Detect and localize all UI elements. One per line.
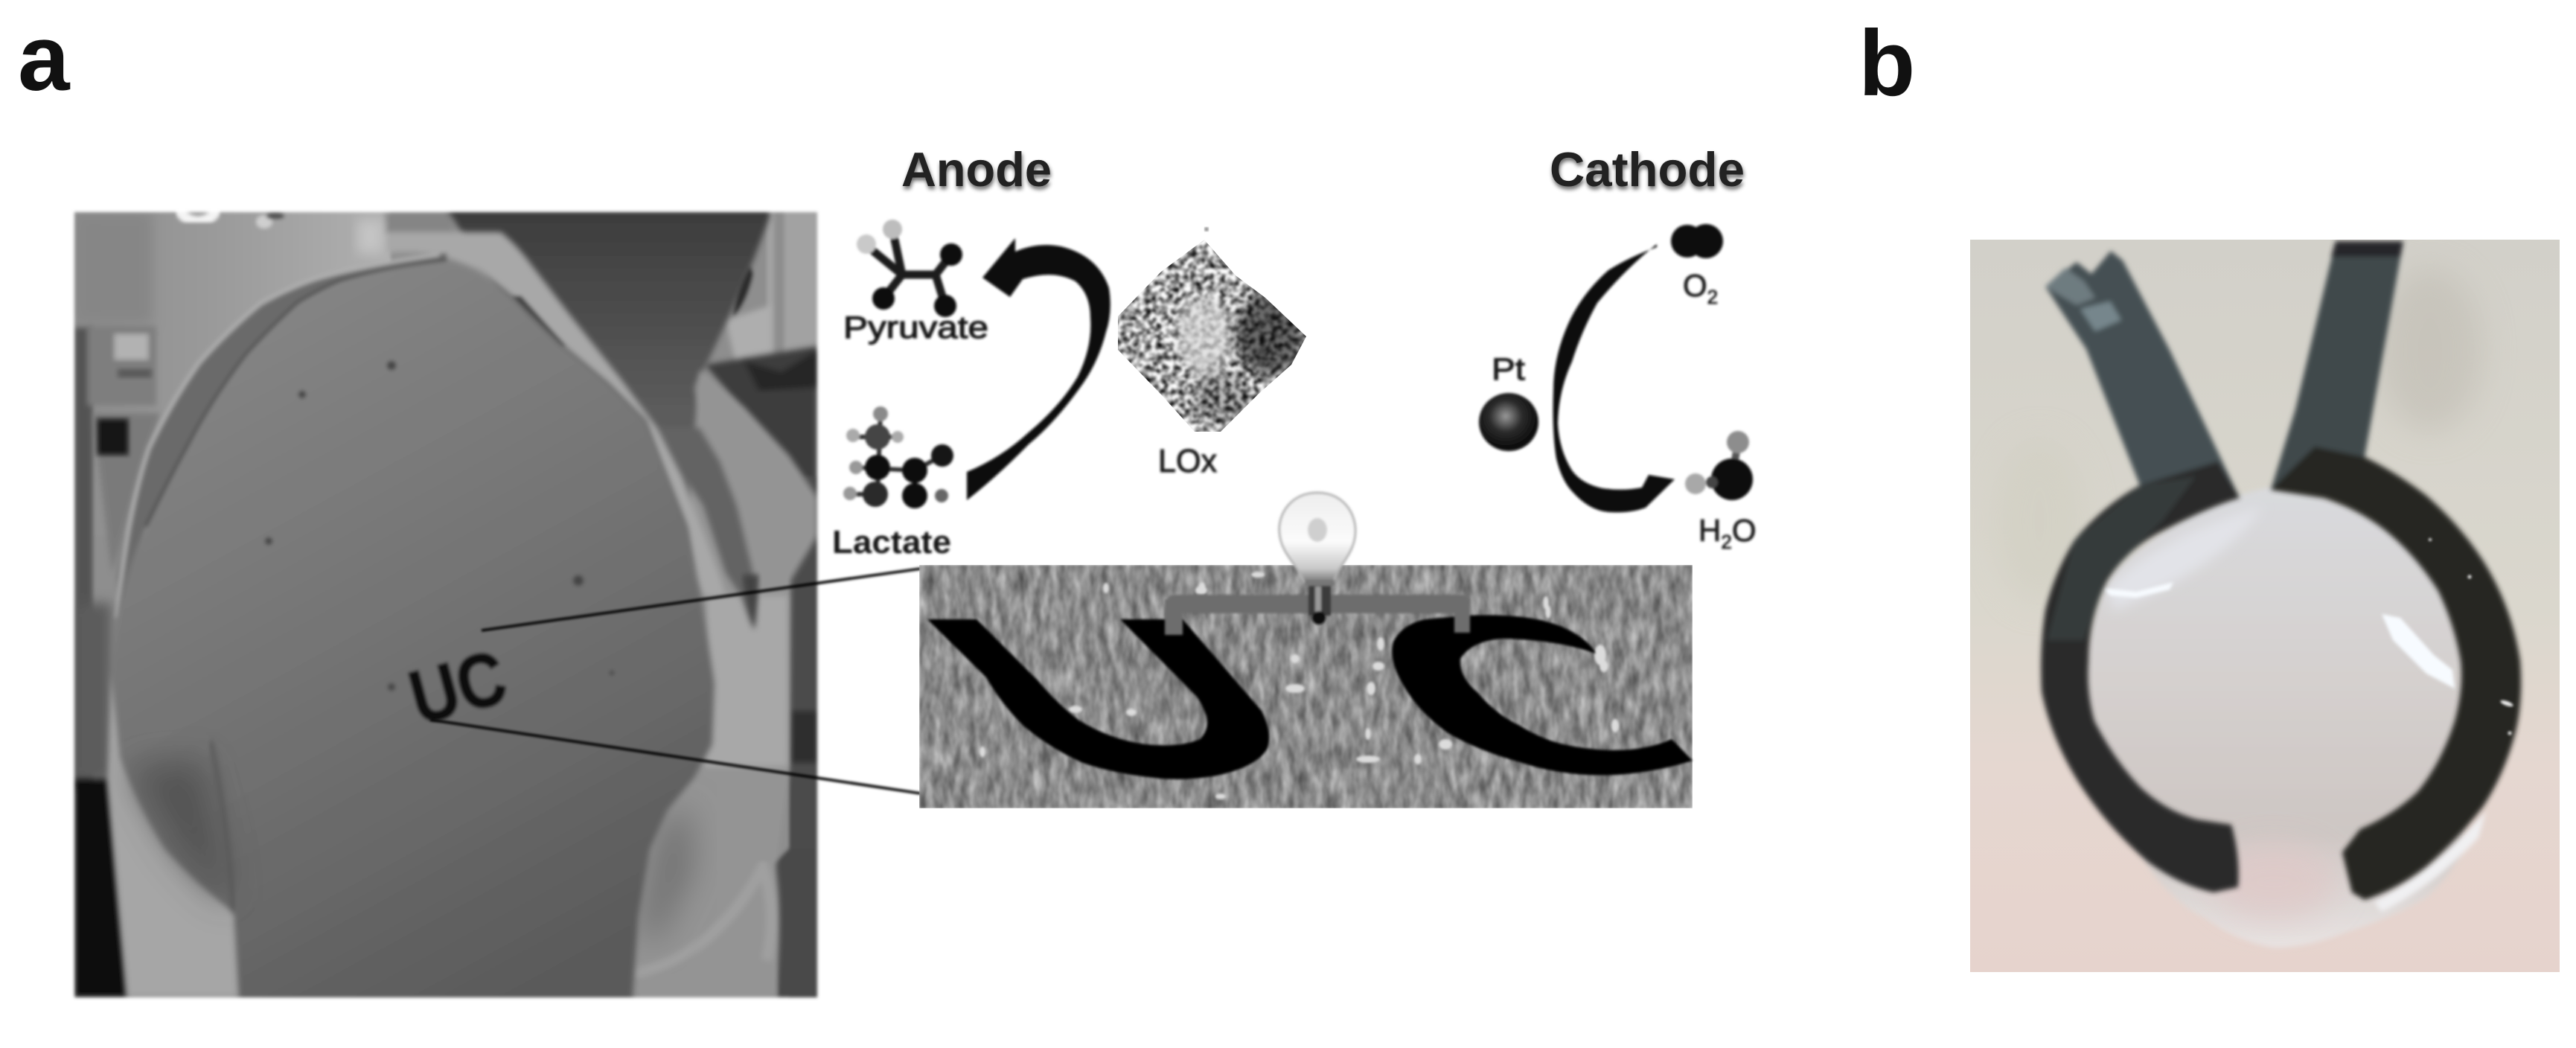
heading: Anode: Anode <box>901 142 1052 196</box>
film highlights <box>2103 582 2455 688</box>
fabric background <box>1970 240 2560 972</box>
icon: platinum sphere <box>1479 393 1538 451</box>
label: H2O: O <box>1732 513 1756 548</box>
UC tattoo text: UC <box>401 634 515 741</box>
label: LOx: LOx <box>1158 443 1217 479</box>
upper film sheen <box>2109 514 2250 608</box>
SEM texture background <box>919 565 1693 808</box>
molecule: oxygen <box>1671 224 1723 258</box>
connector lines from tattoo to enlarged view <box>430 569 921 793</box>
label: O2: O <box>1683 268 1707 303</box>
molecule: pyruvate <box>857 220 962 317</box>
electrode: U (anode) <box>927 619 1269 779</box>
panel a: shoulder photograph with UC tattoo <box>71 207 822 1003</box>
electrode: C (cathode) <box>1392 615 1693 776</box>
neckline band <box>117 253 447 622</box>
white ring at photo top <box>179 208 217 222</box>
singlet: right straps and lower body <box>629 370 817 1001</box>
wire connecting electrodes <box>1165 595 1470 635</box>
photo background <box>71 207 822 1003</box>
label: panel b: b <box>1859 12 1915 115</box>
armpit fold line <box>211 741 234 912</box>
label: O2: 2 <box>1707 286 1718 308</box>
icon: light bulb <box>1279 493 1355 624</box>
label: H2O: 2 <box>1721 531 1732 553</box>
arm fold shadow <box>130 759 231 904</box>
left electrode with contact lead <box>2041 251 2240 892</box>
singlet: shoulder strap <box>387 232 726 595</box>
molecule: lactate <box>843 406 953 508</box>
neck and right background <box>447 208 819 997</box>
dark tuck under strap <box>511 296 566 348</box>
skin spots <box>265 361 614 691</box>
transparent film disc <box>2086 488 2478 948</box>
label: Pyruvate: Pyruvate <box>843 310 988 345</box>
singlet: lower left panel <box>108 674 242 997</box>
label: H2O: H <box>1698 513 1721 548</box>
panel: enlarged SEM view with UC electrodes <box>919 493 1693 808</box>
right electrode with contact lead <box>2271 241 2521 900</box>
panel b: photograph of printed electrode device <box>1970 240 2560 972</box>
enzyme: lactate oxidase structure <box>1113 227 1310 435</box>
pink reflection in lower gap <box>2231 854 2317 920</box>
molecule: water <box>1685 431 1753 500</box>
label: Lactate: Lactate <box>832 524 951 560</box>
SEM bright specks <box>979 572 1619 799</box>
arrow: lactate to pyruvate <box>967 238 1110 500</box>
label: panel a: a <box>18 7 71 110</box>
arm skin <box>112 261 715 1001</box>
electrode glints <box>2429 538 2513 735</box>
heading: Cathode: Cathode <box>1550 142 1745 196</box>
arrow: oxygen to water <box>1553 244 1675 512</box>
label: Pt: Pt <box>1492 351 1525 386</box>
